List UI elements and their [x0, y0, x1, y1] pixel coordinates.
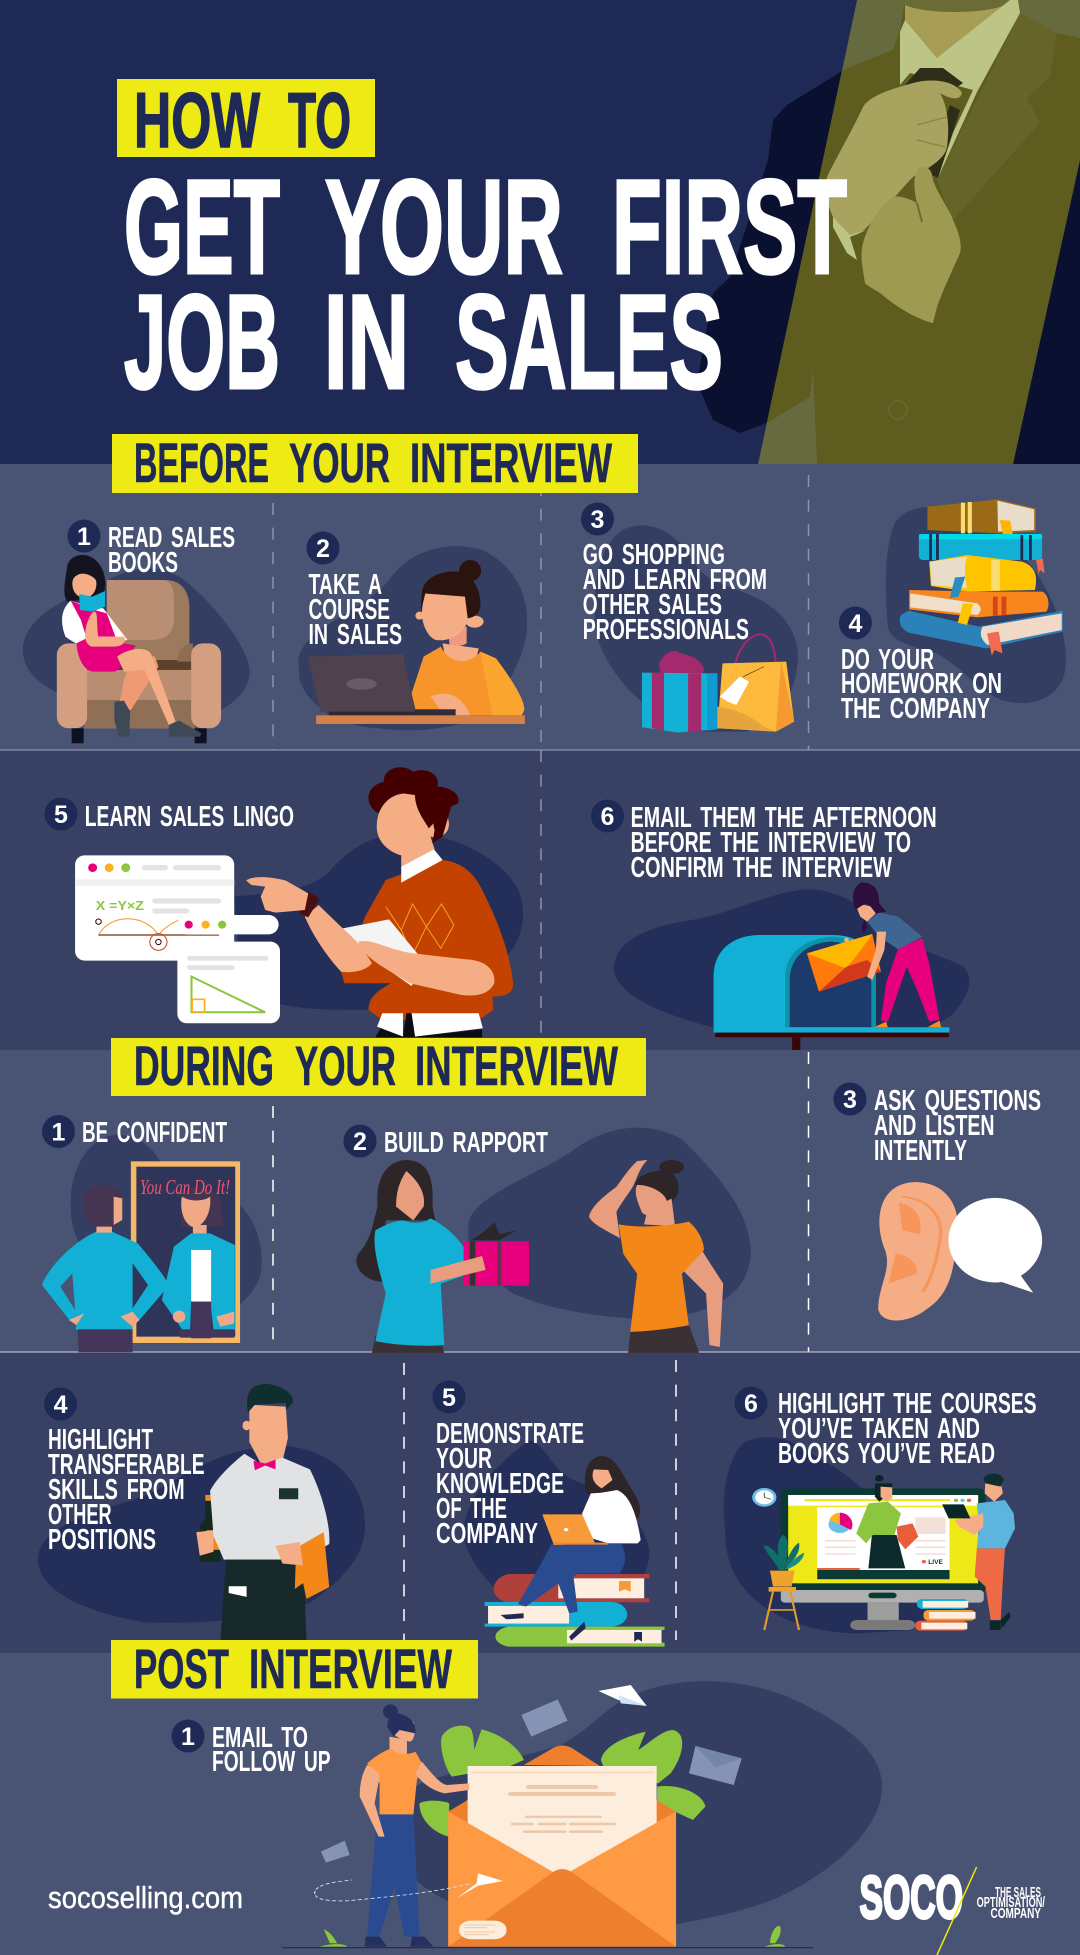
band: before interview row 2	[0, 750, 1080, 1050]
number badge 2: 2	[316, 535, 330, 563]
number badge 5: 5	[54, 801, 68, 829]
section label: post interview	[111, 1637, 478, 1700]
illustration: woman at a mirror: You Can Do It!	[140, 1175, 230, 1199]
number badge 3	[834, 1082, 866, 1116]
number badge 4: 4	[54, 1391, 68, 1419]
text: email to follow up: FOLLOW UP	[212, 1746, 331, 1778]
text: do your homework: HOMEWORK ON	[841, 668, 1002, 700]
text: demonstrate knowledge	[436, 1418, 584, 1550]
number badge 6	[734, 1386, 768, 1420]
section label: how to: HOW	[134, 76, 260, 164]
number badge 4	[839, 606, 872, 640]
text: go shopping: AND LEARN FROM	[583, 564, 767, 596]
illustration: man pointing at windows	[75, 767, 523, 1037]
text: highlight the courses	[778, 1388, 1037, 1470]
text: email to follow up	[212, 1722, 331, 1778]
text: demonstrate knowledge: DEMONSTRATE	[436, 1418, 584, 1450]
text: ask questions	[874, 1085, 1041, 1167]
band: post interview	[0, 1653, 1080, 1955]
number badge 3: 3	[843, 1086, 857, 1114]
section label: before your interview: YOUR	[289, 431, 390, 494]
text: go shopping: PROFESSIONALS	[583, 614, 749, 646]
photo: man adjusting his tie	[697, 0, 1080, 464]
text: demonstrate knowledge: KNOWLEDGE	[436, 1468, 564, 1500]
panel: before 2 take a course	[298, 532, 527, 730]
panel: before 5 learn sales lingo	[44, 767, 523, 1037]
title: get your first job in sales	[124, 153, 847, 417]
text: do your homework: DO YOUR	[841, 644, 934, 676]
text: take a course in sales	[308, 569, 402, 651]
text: take a course in sales: COURSE	[308, 594, 390, 626]
panel: during 6 highlight courses	[724, 1386, 1037, 1633]
text: take a course in sales: IN SALES	[308, 619, 402, 651]
text: do your homework: THE COMPANY	[841, 693, 990, 725]
text: ask questions: INTENTLY	[874, 1135, 967, 1167]
illustration: gift box and shopping bag	[595, 525, 798, 733]
title: get your first job in sales: FIRST	[612, 153, 847, 302]
text: do your homework	[841, 644, 1002, 725]
number badge 2	[306, 532, 340, 564]
number badge 1	[68, 520, 100, 552]
text: demonstrate knowledge: OF THE	[436, 1493, 507, 1525]
text: go shopping: GO SHOPPING	[583, 539, 725, 571]
number badge 2: 2	[353, 1128, 367, 1156]
number badge 1	[42, 1115, 75, 1148]
logo: soco: THE SALES	[995, 1884, 1041, 1901]
illustration: woman with laptop on books	[464, 1440, 665, 1647]
section label: during your interview: INTERVIEW	[415, 1034, 618, 1097]
text: highlight the courses: YOU’VE TAKEN AND	[778, 1413, 980, 1445]
text: ask questions: AND LISTEN	[874, 1110, 994, 1142]
panel: during 2 build rapport	[344, 1124, 751, 1353]
number badge 1	[172, 1720, 204, 1752]
section label: during your interview: YOUR	[295, 1034, 396, 1097]
number badge 5	[44, 798, 78, 830]
illustration: waiter with bottle and towel	[38, 1384, 365, 1640]
illustration: woman at a mirror	[42, 1135, 262, 1352]
logo: soco: COMPANY	[990, 1905, 1041, 1922]
text: email them: CONFIRM THE INTERVIEW	[631, 852, 892, 884]
number badge 2	[344, 1124, 376, 1158]
text: email them	[631, 802, 937, 884]
section label: during your interview: DURING	[134, 1034, 274, 1097]
text: highlight transferable skills: OTHER	[48, 1499, 112, 1531]
panel: during 5 demonstrate knowledge	[432, 1380, 665, 1647]
panel: during 1 be confident	[42, 1115, 262, 1352]
text: highlight transferable skills: SKILLS FROM	[48, 1474, 185, 1506]
divider lines between panels	[0, 475, 1080, 1640]
number badge 1: 1	[77, 523, 91, 551]
number badge 1: 1	[52, 1118, 66, 1146]
text: demonstrate knowledge: YOUR	[436, 1443, 492, 1475]
text: take a course in sales: TAKE A	[308, 569, 382, 601]
text: go shopping: OTHER SALES	[583, 589, 722, 621]
number badge 5: 5	[442, 1384, 456, 1412]
panel: before 6 email them	[591, 800, 969, 1050]
text: email them: EMAIL THEM THE AFTERNOON	[631, 802, 937, 834]
text: highlight transferable skills	[48, 1424, 204, 1556]
illustration: two women and a gift	[356, 1128, 751, 1353]
number badge 3	[581, 502, 614, 536]
title: get your first job in sales: IN	[324, 268, 409, 417]
text: read sales books	[108, 522, 235, 579]
number badge 4: 4	[848, 610, 862, 638]
illustration: woman reading in armchair	[23, 555, 250, 743]
illustration: woman posting an envelope in mailbox	[614, 883, 969, 1050]
illustration: online course on monitor	[724, 1437, 1015, 1633]
text: read sales books: BOOKS	[108, 547, 178, 579]
band: during interview row 1	[0, 1050, 1080, 1352]
band: during interview row 2	[0, 1352, 1080, 1653]
number badge 4	[44, 1388, 77, 1420]
text: email to follow up: EMAIL TO	[212, 1722, 308, 1754]
text: highlight transferable skills: HIGHLIGHT	[48, 1424, 153, 1456]
illustration: ear and speech bubble	[878, 1182, 1042, 1321]
panel: before 3 go shopping	[581, 502, 798, 733]
panel: during 4 transferable skills	[38, 1384, 365, 1640]
text: read sales books: READ SALES	[108, 522, 235, 554]
band: before interview row 1	[0, 464, 1080, 750]
logo: soco	[860, 1864, 1046, 1955]
number badge 6: 6	[601, 803, 614, 831]
section label: during your interview	[111, 1034, 646, 1097]
logo: soco: SOCO	[860, 1864, 963, 1931]
title: get your first job in sales: SALES	[455, 268, 723, 417]
illustration: woman at a laptop	[298, 546, 527, 730]
title: get your first job in sales: GET	[124, 153, 280, 302]
section label: post interview: POST	[134, 1637, 229, 1700]
number badge 5	[432, 1380, 466, 1414]
illustration: stack of books	[886, 499, 1066, 703]
text: highlight transferable skills: TRANSFERABLE	[48, 1449, 204, 1481]
number badge 6	[591, 800, 624, 832]
website address: socoselling.com	[48, 1880, 243, 1915]
text: email them: BEFORE THE INTERVIEW TO	[631, 827, 911, 859]
section label: before your interview: BEFORE	[134, 431, 269, 494]
number badge 6: 6	[744, 1390, 758, 1418]
text: build rapport: BUILD RAPPORT	[384, 1127, 548, 1159]
panel: post interview email to follow up	[172, 1681, 882, 1948]
illustration: man pointing at windows: X =Y×Z	[96, 898, 144, 913]
title: get your first job in sales: YOUR	[325, 153, 563, 302]
number badge 1: 1	[181, 1723, 195, 1751]
title: get your first job in sales: JOB	[124, 268, 280, 417]
illustration: woman with giant envelope	[282, 1681, 882, 1948]
section label: before your interview	[112, 431, 638, 494]
text: learn sales lingo: LEARN SALES LINGO	[85, 801, 294, 833]
illustration: online course on monitor: LIVE	[928, 1560, 943, 1566]
text: highlight transferable skills: POSITIONS	[48, 1524, 156, 1556]
text: go shopping	[583, 539, 767, 646]
number badge 3: 3	[591, 506, 604, 534]
section label: post interview: INTERVIEW	[249, 1637, 452, 1700]
panel: before 1 read sales books	[23, 520, 250, 743]
section label: how to: TO	[288, 76, 351, 164]
panel: before 4 do your homework	[839, 499, 1066, 725]
text: demonstrate knowledge: COMPANY	[436, 1518, 538, 1550]
header background	[0, 0, 1080, 464]
panel: during 3 ask questions	[834, 1082, 1042, 1321]
section label: before your interview: INTERVIEW	[410, 431, 612, 494]
text: be confident: BE CONFIDENT	[82, 1117, 227, 1149]
